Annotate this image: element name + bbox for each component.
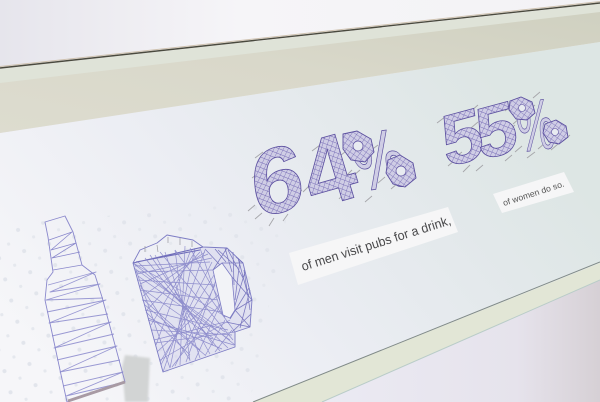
nail shadows 55% [437, 92, 570, 172]
nail shadows 64% [248, 145, 412, 226]
caption: men: of men visit pubs for a drink, [299, 213, 453, 274]
digit 6: 6 [245, 122, 309, 238]
icon: string art bottle [45, 216, 125, 402]
dotted pattern on board [0, 200, 290, 402]
caption: women: of women do so. [502, 179, 565, 208]
percent sign women: % [512, 83, 559, 168]
panel: top frame [0, 2, 600, 133]
digit 5 first: 5 [436, 91, 488, 183]
statistic: 64% for men [245, 111, 418, 238]
bottle shadow [122, 355, 150, 402]
digit 4: 4 [289, 111, 368, 229]
floor area lower right [322, 280, 600, 402]
digit 5 second: 5 [470, 84, 522, 176]
percent sign men: % [339, 111, 418, 209]
icon: string art beer mug [133, 235, 252, 372]
panel: bottom frame [253, 262, 600, 402]
statistic: 55% for women [436, 83, 570, 183]
caption: women [493, 172, 574, 213]
